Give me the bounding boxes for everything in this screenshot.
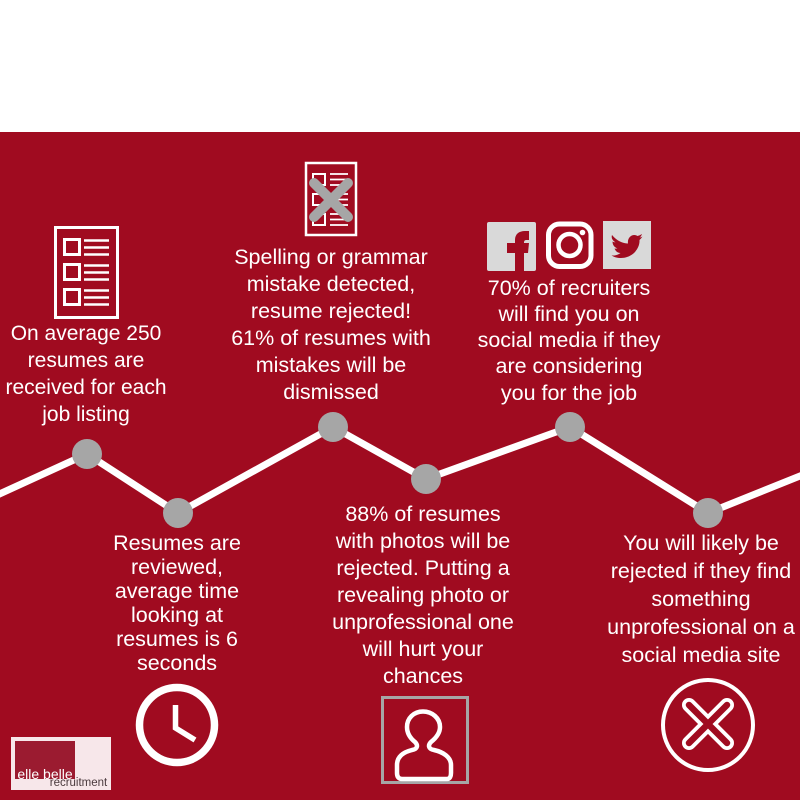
text: photos on resumes: rejected. Putting a — [336, 556, 510, 580]
text: resume review time: average time — [115, 579, 239, 603]
text: photos on resumes: unprofessional one — [332, 610, 514, 634]
icon: clock — [140, 688, 214, 762]
text: social media rejection: social media site — [622, 643, 780, 667]
icon: instagram — [548, 224, 591, 266]
text: photos on resumes: revealing photo or — [337, 583, 509, 607]
text: photos on resumes: 88% of resumes — [345, 502, 501, 526]
text: social media rejection: something — [651, 587, 751, 611]
text: spelling mistakes: 61% of resumes with — [231, 326, 431, 350]
text: photos on resumes: will hurt your — [362, 637, 483, 661]
text: spelling mistakes: Spelling or grammar — [234, 245, 428, 269]
icon: resume — [56, 228, 118, 318]
text: photos on resumes: with photos will be — [335, 529, 510, 553]
text: resume review time: resumes is 6 — [116, 627, 238, 651]
text: social media rejection: rejected if they find — [611, 559, 791, 583]
text: resumes received: resumes are — [28, 349, 144, 372]
timeline line — [0, 427, 800, 513]
text: social media rejection: You will likely be — [623, 531, 779, 555]
text: resumes received: job listing — [41, 403, 130, 426]
text: resumes received: On average 250 — [11, 322, 161, 345]
icon: profile photo — [382, 698, 468, 782]
text: social media recruiters: social media if they — [478, 328, 661, 352]
text: social media recruiters: 70% of recruiters — [488, 276, 650, 300]
text: resumes received: received for each — [5, 376, 167, 399]
logo: elle belle recruitment — [11, 737, 111, 790]
text: resume review time: reviewed, — [131, 555, 223, 579]
text: spelling mistakes: resume rejected! — [251, 299, 411, 323]
icon: rejected resume — [306, 163, 356, 235]
icon: twitter — [603, 221, 651, 269]
text: resume review time: looking at — [131, 603, 223, 627]
text: social media recruiters: you for the job — [501, 381, 637, 405]
icon: facebook — [487, 222, 536, 271]
text: resume review time: seconds — [137, 651, 217, 675]
text: spelling mistakes: dismissed — [283, 380, 379, 404]
text: spelling mistakes: mistake detected, — [247, 272, 415, 296]
text: social media rejection: unprofessional on a — [607, 615, 795, 639]
icon: rejection cross — [663, 680, 753, 770]
logo: elle belle recruitment: elle belle — [17, 766, 73, 782]
text: social media recruiters: will find you on — [497, 302, 640, 326]
text: photos on resumes: chances — [383, 664, 463, 688]
text: spelling mistakes: mistakes will be — [256, 353, 406, 377]
text: social media recruiters: are considering — [495, 354, 643, 378]
timeline nodes — [72, 412, 723, 528]
text: resume review time: Resumes are — [113, 531, 241, 555]
logo: elle belle recruitment: recruitment — [50, 777, 108, 789]
